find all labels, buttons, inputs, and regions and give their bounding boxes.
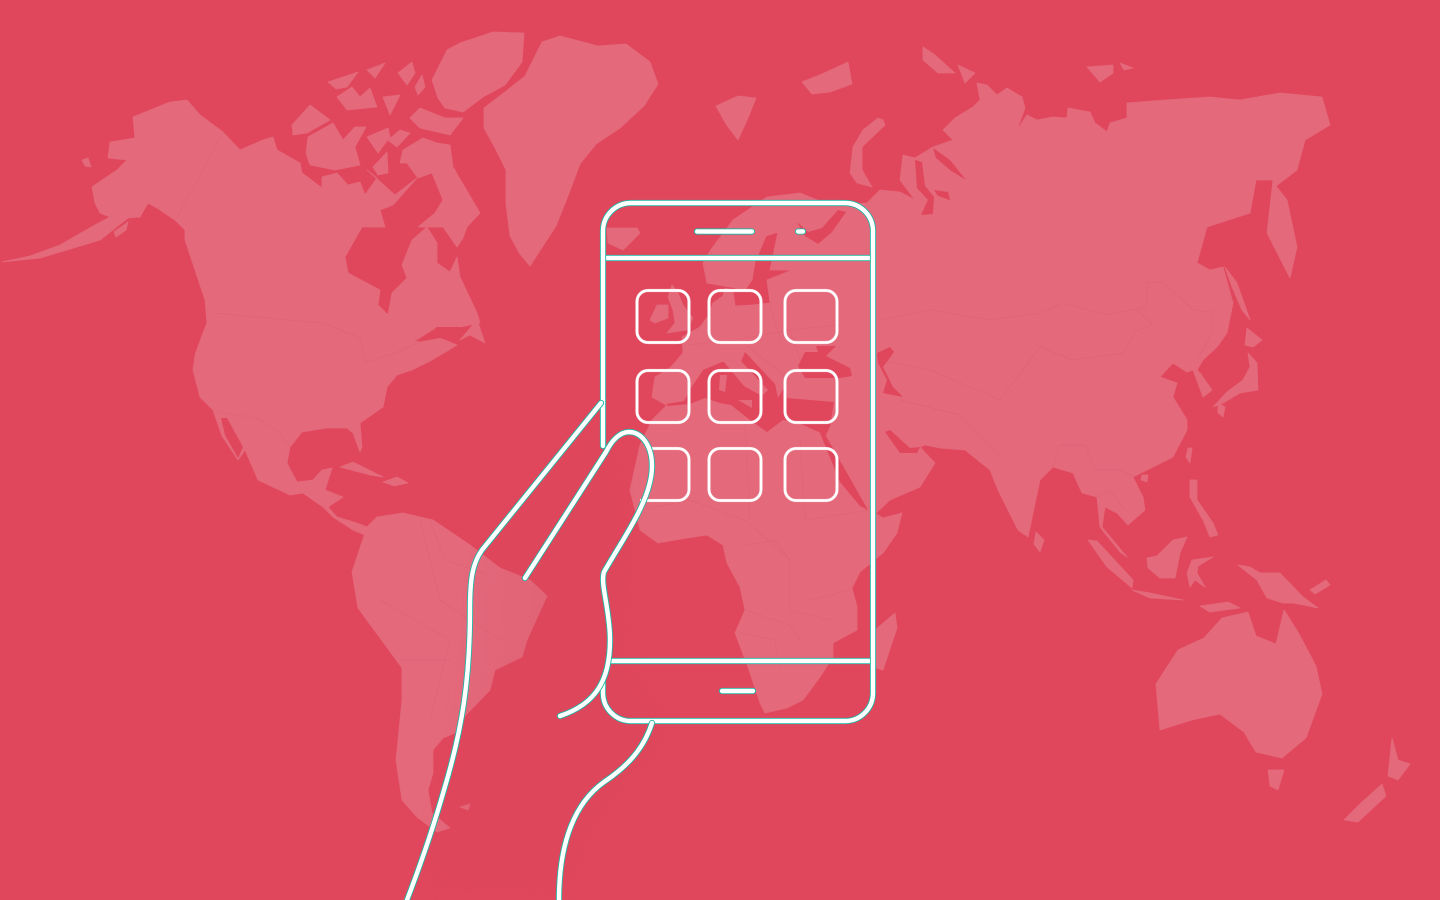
hispaniola bbox=[383, 477, 408, 486]
gulf of california bbox=[221, 418, 243, 458]
persian gulf bbox=[885, 430, 920, 453]
kyushu bbox=[1218, 403, 1225, 417]
new britain bbox=[1310, 580, 1330, 594]
camera bbox=[798, 228, 803, 235]
newfoundland bbox=[460, 320, 485, 343]
top divider bbox=[604, 255, 872, 261]
new guinea bbox=[1238, 565, 1318, 608]
greenland bbox=[484, 36, 658, 266]
somerset islands bbox=[367, 128, 390, 153]
bottom divider bbox=[610, 658, 872, 664]
tasmania bbox=[1268, 770, 1284, 790]
caspian sea bbox=[877, 347, 903, 397]
cuba bbox=[340, 462, 383, 477]
ireland bbox=[650, 305, 668, 323]
sri lanka bbox=[1034, 532, 1044, 552]
madagascar bbox=[872, 613, 897, 670]
hand bbox=[407, 403, 652, 900]
sumatra bbox=[1088, 540, 1133, 588]
hainan bbox=[1141, 475, 1148, 482]
falkland islands bbox=[460, 804, 470, 810]
black sea bbox=[798, 346, 852, 378]
iceland bbox=[607, 228, 640, 250]
home button bbox=[722, 688, 753, 694]
phone bbox=[603, 203, 873, 721]
australia bbox=[1156, 610, 1322, 758]
hand shadow bbox=[430, 430, 660, 880]
banks island bbox=[292, 105, 330, 135]
sicily bbox=[738, 400, 752, 408]
speaker bbox=[697, 228, 752, 235]
mediterranean islands and peninsulas bbox=[719, 360, 768, 408]
lesser sunda islands bbox=[1200, 602, 1240, 612]
taiwan bbox=[1186, 448, 1192, 463]
hokkaido bbox=[1245, 328, 1262, 347]
st lawrence island bbox=[82, 158, 91, 167]
mediterranean sea bbox=[666, 352, 834, 432]
south america bbox=[352, 513, 547, 832]
ellesmere island bbox=[432, 32, 524, 112]
red sea bbox=[820, 433, 868, 510]
taz estuary bbox=[934, 190, 950, 200]
svalbard bbox=[716, 96, 756, 140]
inland seas bbox=[221, 148, 966, 510]
ob gulf bbox=[915, 160, 934, 215]
new zealand bbox=[1388, 738, 1410, 780]
victoria island bbox=[306, 123, 366, 170]
kodiak island bbox=[114, 222, 128, 237]
franz josef land bbox=[802, 62, 852, 94]
app icon row 1 bbox=[637, 290, 837, 342]
yenisei gulf bbox=[933, 148, 966, 180]
eurasia bbox=[652, 83, 1330, 557]
africa bbox=[630, 400, 902, 713]
white sea bbox=[797, 210, 846, 244]
parry islands bbox=[328, 72, 358, 89]
new siberian islands bbox=[1087, 65, 1113, 82]
wrist edge bbox=[559, 723, 652, 900]
java bbox=[1132, 590, 1183, 600]
great britain bbox=[667, 285, 693, 333]
italy bbox=[724, 360, 768, 396]
country borders bbox=[177, 132, 1212, 720]
app icons bbox=[637, 290, 837, 500]
baffin island bbox=[400, 138, 480, 247]
borneo bbox=[1147, 537, 1187, 578]
app icon row 2 bbox=[637, 370, 837, 422]
north america bbox=[2, 100, 480, 535]
devon island bbox=[410, 108, 463, 135]
philippines bbox=[1190, 480, 1218, 537]
sulawesi bbox=[1187, 557, 1213, 587]
gulf of st lawrence bbox=[418, 327, 460, 343]
phone body bbox=[603, 203, 873, 721]
severnaya zemlya bbox=[923, 47, 955, 73]
sardinia bbox=[719, 375, 727, 392]
palm edge bbox=[407, 403, 601, 900]
thumb bbox=[525, 432, 652, 716]
app icon row 3 bbox=[640, 448, 837, 500]
novaya zemlya bbox=[850, 118, 885, 187]
sakhalin bbox=[1225, 267, 1250, 320]
honshu bbox=[1213, 353, 1258, 407]
